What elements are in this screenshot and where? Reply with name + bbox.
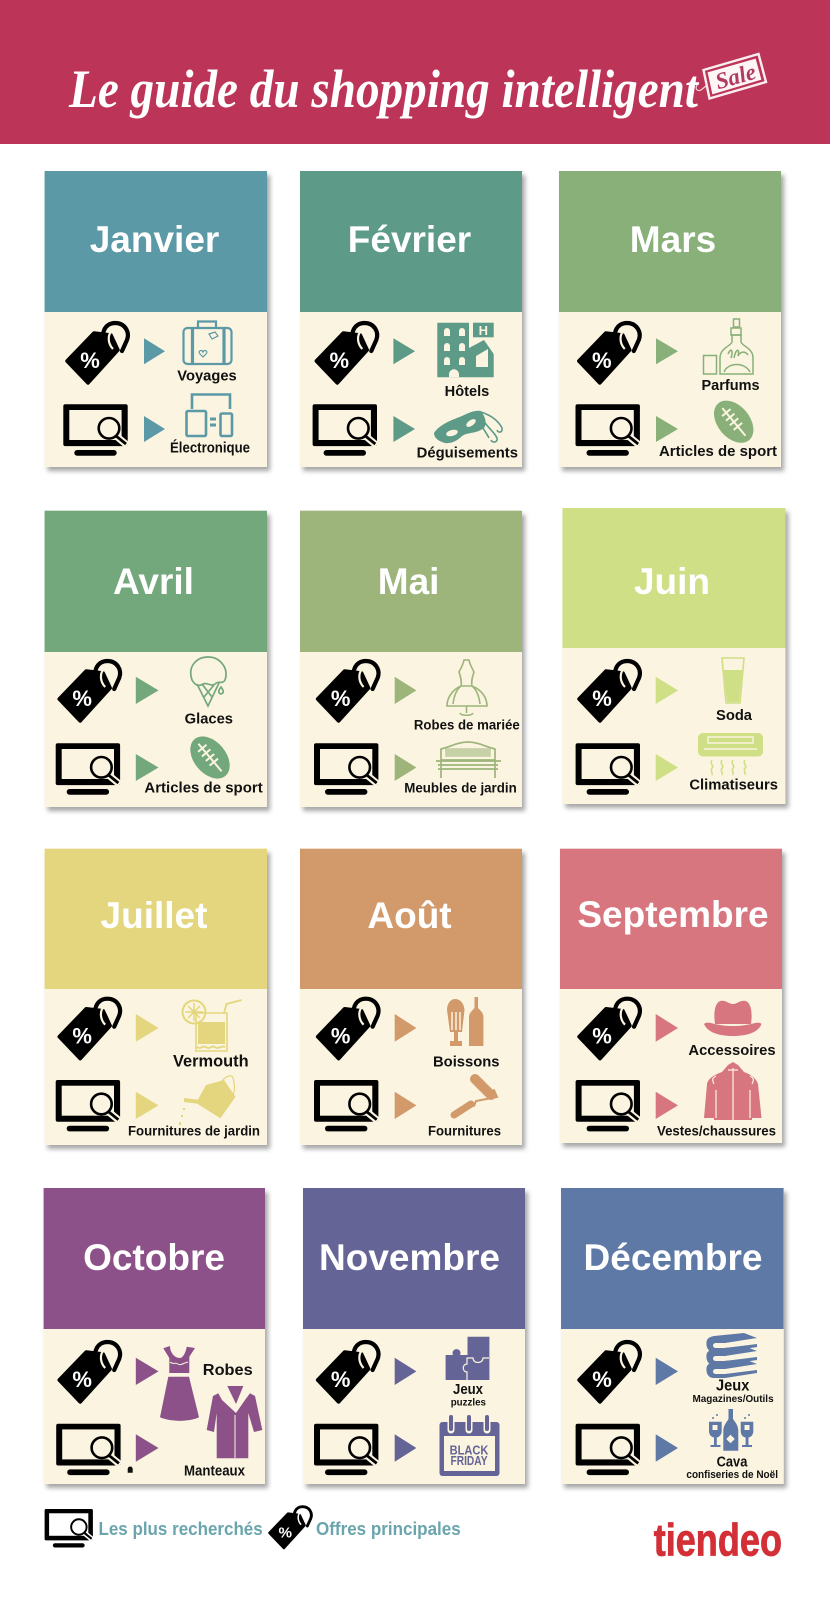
heading: Mai [378,561,439,602]
arrow [656,677,678,704]
panel: Octobre [44,1188,265,1484]
legend [45,1507,461,1548]
icon: discount tag: % [592,1367,612,1392]
icon: coat [207,1386,262,1458]
icon: search monitor [576,1424,640,1475]
arrow [136,677,158,704]
icon: small mark [128,1467,133,1473]
icon: discount tag [579,1342,640,1402]
arrow [395,677,416,704]
icon: search monitor [56,1424,121,1475]
icon: discount tag [579,999,640,1059]
label: Manteaux [184,1464,245,1480]
arrow [395,754,416,781]
icon: ice cream [191,657,226,706]
icon: drinks [447,997,483,1046]
arrow [136,1358,158,1385]
icon: paint roller [454,1079,497,1115]
label: Fournitures [428,1123,501,1139]
label: Jeux [453,1382,483,1398]
icon: search monitor [314,743,378,795]
header banner [0,0,830,144]
icon: search monitor [576,743,640,795]
icon: legend tag: % [279,1525,293,1542]
icon: hotel: H [479,323,488,338]
arrow [395,1014,416,1042]
icon: discount tag [59,999,120,1059]
icon: champagne [709,1409,753,1451]
heading: Septembre [577,894,769,935]
icon: sale ticket: Sale [712,59,759,94]
label: Parfums [702,378,760,394]
icon: discount tag: % [592,1024,612,1049]
icon: suitcase [184,322,232,364]
arrow [144,338,165,364]
label: Voyages [177,369,237,385]
panel: Septembre [560,849,782,1143]
arrow [144,416,165,442]
icon: devices [186,394,232,436]
heading: Juillet [101,895,207,936]
logo: tiendeo: tiendeo [654,1514,782,1566]
label: confiseries de Noël [686,1469,778,1481]
icon: search monitor [56,743,120,795]
icon: search monitor [314,1080,378,1131]
legend label: Offres principales [316,1519,461,1539]
icon: discount tag: % [592,348,612,373]
panel: Juin [562,508,786,804]
icon: dress [160,1346,199,1421]
icon: perfume [704,319,753,374]
arrow [395,1092,416,1119]
icon: rugby ball [706,393,761,450]
icon: discount tag: % [592,686,612,711]
icon: discount tag [59,1342,120,1402]
arrow [395,1358,416,1385]
arrow [395,1434,416,1462]
panel: Août [300,849,522,1145]
icon: discount tag [318,661,378,721]
icon: rugby ball [182,729,238,786]
label: Meubles de jardin [404,779,517,795]
heading: Mars [630,219,716,260]
arrow [656,754,678,781]
icon: search monitor [576,1080,640,1131]
icon: watering can [180,1076,236,1125]
icon: discount tag [318,999,378,1059]
panel: Avril [45,511,267,807]
heading: Janvier [90,219,219,260]
icon: discount tag: % [330,348,349,373]
icon: black friday calendar [440,1416,500,1476]
icon: black friday calendar: FRIDAY [450,1453,488,1468]
icon: discount tag [579,661,640,721]
label: Déguisements [417,445,518,461]
arrow [656,416,678,442]
icon: search monitor [576,404,640,456]
heading: Août [367,895,452,936]
heading: Décembre [584,1237,762,1278]
label: Robes [203,1362,253,1379]
icon: legend tag [269,1507,311,1548]
icon: search monitor [56,1080,120,1131]
label: Fournitures de jardin [128,1123,260,1139]
label: Vestes/chaussures [657,1123,776,1139]
icon: search monitor [314,1424,378,1475]
label: Articles de sport [659,444,777,460]
icon: carnival mask [434,411,502,443]
label: Magazines/Outils [692,1393,774,1405]
arrow [393,416,415,442]
heading: Novembre [319,1237,500,1278]
icon: search monitor [313,404,377,456]
icon: discount tag: % [331,1367,350,1392]
label: Cava [717,1455,748,1471]
arrow [136,1014,158,1042]
icon: discount tag [318,1342,378,1402]
label: Accessoires [688,1043,776,1059]
icon: discount tag [67,323,128,383]
legend label: Les plus recherchés [98,1519,263,1539]
arrow [136,1092,158,1119]
icon: discount tag [316,323,377,383]
title: Le guide du shopping intelligent [68,59,700,119]
icon: discount tag: % [331,1024,350,1049]
icon: books [706,1333,757,1378]
icon: hat [704,1001,762,1036]
label: Articles de sport [144,781,263,797]
icon: discount tag: % [72,686,92,711]
arrow [136,754,158,781]
icon: search monitor [63,404,128,456]
icon: hotel [437,323,494,377]
icon: wedding dress [447,660,487,715]
arrow [656,338,678,364]
icon: puzzle [446,1337,489,1380]
panel: Juillet [45,849,267,1145]
heading: Octobre [83,1237,225,1278]
icon: air conditioner [698,733,763,775]
panel: Février [300,171,522,467]
label: Vermouth [173,1052,249,1071]
icon: discount tag: % [72,1367,92,1392]
arrow [656,1434,678,1462]
panel: Janvier [45,171,267,467]
icon: sale ticket [696,54,766,98]
icon: jacket [704,1062,762,1120]
icon: cocktail [182,1000,242,1051]
label: Jeux [716,1378,749,1395]
label: Électronique [170,440,250,457]
icon: discount tag [579,323,640,383]
label: Boissons [433,1055,500,1071]
arrow [656,1358,678,1385]
icon: garden bench [436,742,501,778]
panel: Mai [300,511,522,807]
icon: black friday calendar: BLACK [450,1442,489,1457]
panel: Décembre [561,1188,784,1484]
label: puzzles [451,1398,486,1409]
label: Robes de mariée [414,717,520,732]
heading: Juin [634,561,710,602]
label: Glaces [185,711,233,727]
panel: Mars [559,171,781,467]
arrow [656,1014,678,1042]
heading: Avril [113,561,194,602]
icon: discount tag: % [331,686,350,711]
label: Hôtels [445,384,489,400]
heading: Février [348,219,471,260]
icon: legend monitor [45,1509,93,1548]
icon: discount tag [59,661,120,721]
label: Climatiseurs [689,777,778,793]
arrow [656,1092,678,1119]
icon: discount tag: % [72,1024,92,1049]
arrow [393,338,415,364]
icon: soda glass [722,658,744,703]
panel: Novembre [303,1188,525,1484]
icon: discount tag: % [80,348,100,373]
label: Soda [716,708,753,724]
arrow [136,1434,158,1462]
